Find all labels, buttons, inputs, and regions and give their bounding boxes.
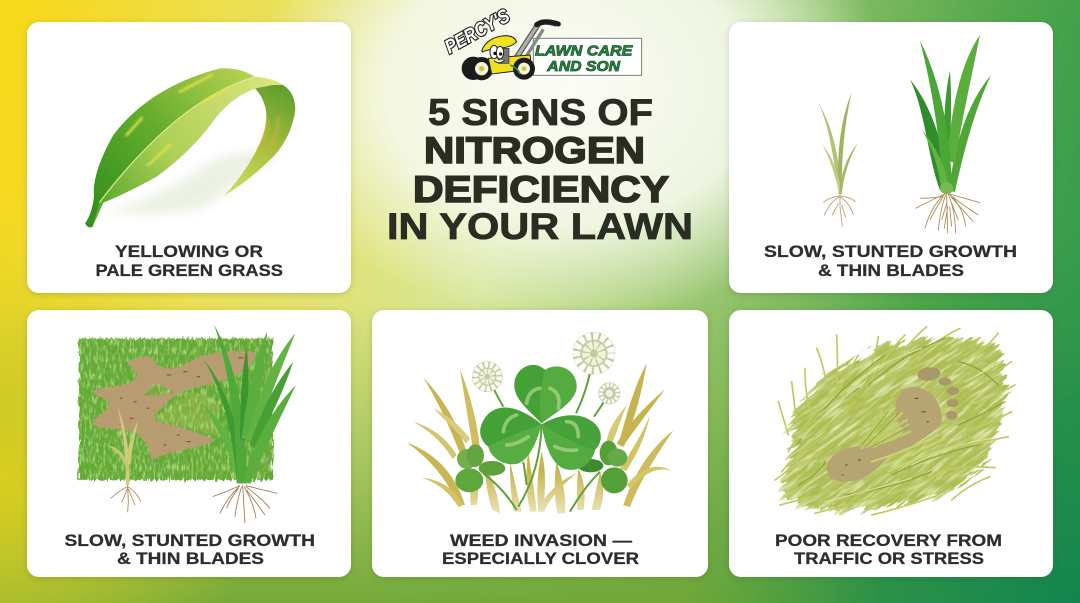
flower heads: [472, 332, 620, 404]
healthy plant: [201, 324, 296, 523]
caption: PALE GREEN GRASS: [96, 261, 283, 280]
turf square: [79, 338, 273, 480]
title: IN YOUR LAWN: [387, 206, 693, 247]
icon: curved yellowing leaf: [85, 68, 295, 227]
card background: [27, 310, 351, 577]
logo brand name: PERCY'S: [442, 6, 514, 58]
company logo: [442, 6, 642, 80]
caption: SLOW, STUNTED GROWTH: [64, 531, 315, 550]
title: [387, 92, 693, 247]
caption: SLOW, STUNTED GROWTH: [764, 242, 1017, 261]
title: DEFICIENCY: [413, 169, 669, 210]
soil speckles: [120, 358, 243, 445]
card background: [372, 310, 708, 577]
grass tuft over arch: [858, 405, 958, 472]
regrowth patch: [153, 392, 220, 435]
panel: patchy lawn growth: [27, 310, 351, 577]
icon: patchy turf square with grass plants: [79, 324, 296, 523]
caption: & THIN BLADES: [818, 261, 964, 280]
card background: [729, 22, 1053, 293]
grass tuft in soil: [145, 385, 173, 396]
caption: [764, 242, 1017, 280]
panel: weed invasion: [372, 310, 708, 577]
card background: [729, 310, 1053, 577]
clover stems: [483, 365, 605, 512]
caption: [442, 531, 639, 568]
caption: [64, 531, 315, 568]
logo text box: LAWN CARE: [535, 43, 633, 60]
weak plant: [107, 407, 141, 512]
small weak plant: [818, 93, 858, 227]
card background: [27, 22, 351, 293]
main clover: [480, 365, 601, 470]
logo text box: AND SON: [546, 58, 621, 75]
panel: poor recovery: [701, 231, 1080, 603]
small clovers: [455, 441, 628, 493]
caption: [775, 531, 1002, 568]
caption: POOR RECOVERY FROM: [775, 531, 1002, 550]
grass blades: [775, 327, 1015, 515]
caption: ESPECIALLY CLOVER: [442, 549, 639, 568]
bare soil patch: [93, 351, 256, 460]
large healthy plant: [910, 35, 991, 233]
caption: & THIN BLADES: [117, 549, 264, 568]
caption: YELLOWING OR: [115, 242, 263, 261]
icon: clover among dry grass: [407, 332, 673, 513]
title: NITROGEN: [424, 130, 645, 171]
title: 5 SIGNS OF: [428, 92, 653, 133]
caption: [96, 242, 283, 280]
footprint in soil: [827, 366, 959, 482]
caption: TRAFFIC OR STRESS: [794, 549, 984, 568]
logo text box: [533, 38, 642, 75]
grass mass: [701, 231, 1080, 603]
icon: footprint in grass: [701, 231, 1080, 603]
panel: slow stunted growth comparison: [729, 22, 1053, 293]
panel: yellowing or pale green grass: [27, 22, 351, 293]
caption: WEED INVASION —: [450, 531, 632, 550]
icon: small and healthy grass plants: [818, 35, 991, 233]
mower illustration: [462, 22, 558, 80]
dry grass blades: [407, 363, 673, 513]
